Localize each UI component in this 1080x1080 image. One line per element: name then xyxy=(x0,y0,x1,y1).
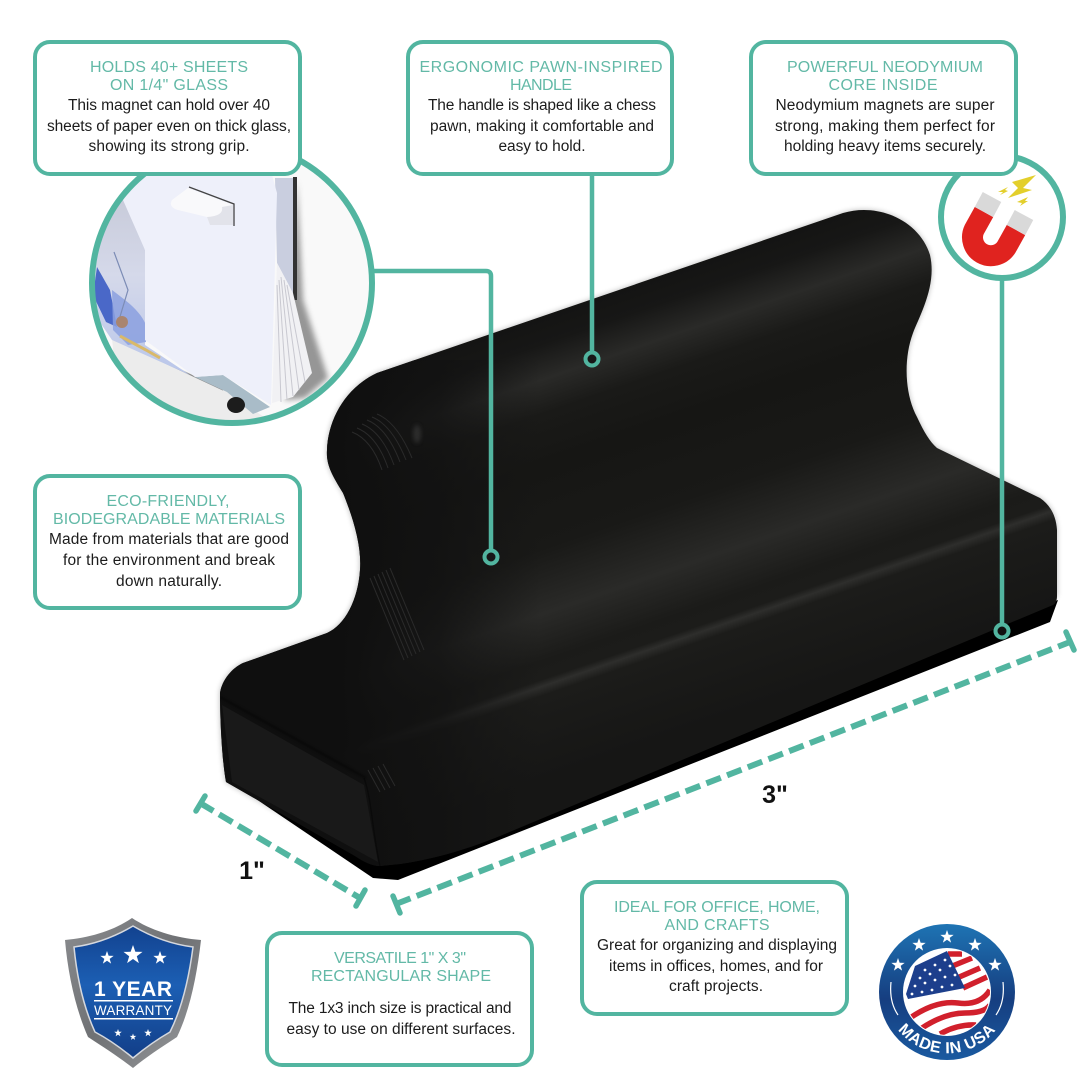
callout: rectangular shape: easy to use on different surfaces. xyxy=(286,1021,516,1038)
lower glass edge xyxy=(112,340,262,420)
icon: magnet xyxy=(973,197,1024,256)
connector: neodymium core xyxy=(996,278,1008,638)
callout: ergonomic handle: easy to hold. xyxy=(498,138,586,155)
product: black rectangular magnet xyxy=(210,210,1058,880)
callout: ergonomic handle: HANDLE xyxy=(510,77,572,94)
blue flowers xyxy=(93,252,160,358)
dimension: 1 inch xyxy=(196,796,365,906)
callout: holds 40+ sheets: ON 1/4" GLASS xyxy=(110,77,228,94)
callout: neodymium core: holding heavy items securely. xyxy=(784,138,986,155)
callout: eco-friendly: down naturally. xyxy=(116,573,222,590)
stars xyxy=(100,945,167,1040)
photo circle: magnet holding sheets on glass xyxy=(85,143,372,425)
heading: IDEAL FOR OFFICE, HOME, xyxy=(614,899,820,916)
bottom art strip xyxy=(195,375,270,414)
callout: rectangular shape: RECTANGULAR SHAPE xyxy=(311,968,491,985)
callout: holds 40+ sheets xyxy=(35,42,300,174)
callout: eco-friendly: for the environment and break xyxy=(63,552,275,569)
heading: VERSATILE 1" X 3" xyxy=(334,950,466,967)
callout: holds 40+ sheets: sheets of paper even on thick glass, xyxy=(47,118,291,135)
callout: eco-friendly xyxy=(35,476,300,608)
fanned pages xyxy=(282,280,312,400)
callout: ergonomic handle: pawn, making it comfortable and xyxy=(430,118,654,135)
callout: neodymium core xyxy=(751,42,1016,174)
heading: ERGONOMIC PAWN-INSPIRED xyxy=(420,59,662,76)
body: Neodymium magnets are super xyxy=(776,97,994,114)
magnet shading xyxy=(220,360,498,866)
magnet sole xyxy=(225,600,1058,880)
body: Made from materials that are good xyxy=(49,531,289,548)
shield face xyxy=(74,926,193,1058)
label: 1 inch: 1" xyxy=(239,857,265,885)
icon circle: horseshoe magnet xyxy=(941,156,1063,278)
badge: made in USA xyxy=(879,924,1015,1060)
callout: ergonomic handle xyxy=(408,42,672,174)
soft shadow xyxy=(220,210,1057,856)
callout: neodymium core: CORE INSIDE xyxy=(828,77,938,94)
warranty text: 1 YEAR xyxy=(94,978,172,1001)
callout: ideal for office: items in offices, homes, and for xyxy=(609,958,823,975)
callout: rectangular shape xyxy=(267,933,532,1065)
connector: handle callout xyxy=(586,174,598,366)
wall shadow xyxy=(285,180,328,400)
body: Great for organizing and displaying xyxy=(597,937,837,954)
heading: POWERFUL NEODYMIUM xyxy=(787,59,983,76)
front sheet xyxy=(123,175,277,405)
bottom clip xyxy=(227,397,245,413)
small white magnet xyxy=(171,187,234,226)
ridged print texture xyxy=(352,414,424,792)
icon: lightning bolts xyxy=(998,175,1036,206)
glass art panel xyxy=(95,200,190,375)
badge: 1 year warranty xyxy=(65,918,201,1068)
shield frame xyxy=(65,918,201,1068)
callout: ideal for office xyxy=(582,882,847,1014)
dimension: 3 inch xyxy=(393,632,1074,913)
body: This magnet can hold over 40 xyxy=(68,97,270,114)
callout: eco-friendly: BIODEGRADABLE MATERIALS xyxy=(53,511,285,528)
callout: ideal for office: craft projects. xyxy=(669,978,763,995)
body: The handle is shaped like a chess xyxy=(428,97,656,114)
flag xyxy=(906,951,990,1034)
callout: ideal for office: AND CRAFTS xyxy=(664,917,770,934)
callout: neodymium core: strong, making them perfect for xyxy=(775,118,995,135)
callout: holds 40+ sheets: showing its strong grip. xyxy=(88,138,250,155)
body: The 1x3 inch size is practical and xyxy=(288,1000,512,1017)
badge text: MADE IN USA xyxy=(898,1023,996,1054)
connector: circle photo to handle xyxy=(372,271,498,564)
heading: ECO-FRIENDLY, xyxy=(106,493,230,510)
badge: 1 year warranty: WARRANTY xyxy=(94,1003,172,1018)
ring stars xyxy=(891,930,1002,971)
back sheets xyxy=(275,178,293,293)
magnet body xyxy=(220,210,1057,866)
label: 3 inch: 3" xyxy=(762,781,788,809)
heading: HOLDS 40+ SHEETS xyxy=(90,59,248,76)
